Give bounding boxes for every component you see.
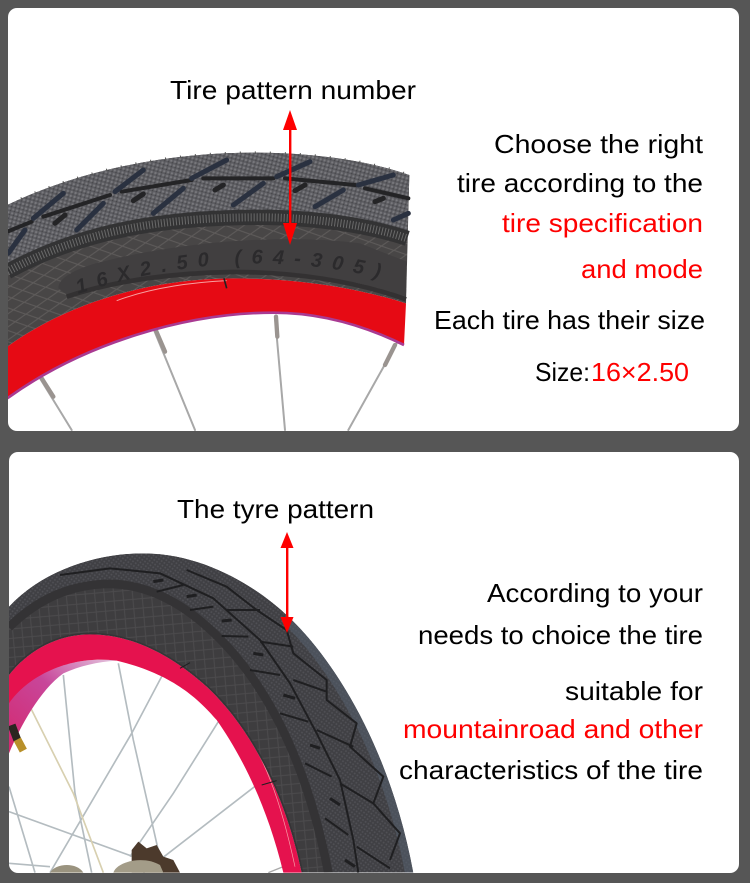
photo: wheel with pink rim <box>9 553 413 873</box>
text block: size: 16×2.50 <box>591 357 689 387</box>
text block: choose the right tire: tire specification <box>502 208 703 238</box>
rim <box>9 634 302 873</box>
rim <box>7 278 406 398</box>
label: tire pattern number: Tire pattern number <box>170 75 416 105</box>
text block: choose the right tire: and mode <box>581 254 703 284</box>
tire body <box>7 153 409 347</box>
text block: suitable terrain: mountainroad and other <box>403 714 703 744</box>
valve mark <box>224 278 227 288</box>
text block: choice the tire <box>420 583 703 644</box>
text block: suitable terrain <box>400 681 703 780</box>
sidewall marking: 16X2.50 (64-305) <box>77 250 381 293</box>
panel: tyre pattern <box>9 452 739 873</box>
text block: size: Size: <box>535 357 590 387</box>
text block: choose the right tire: Choose the right <box>494 129 704 159</box>
arrow: tyre pattern <box>280 532 294 633</box>
tread grooves <box>7 160 408 253</box>
text block: choice the tire: needs to choice the tire <box>418 620 703 650</box>
photo: tire close-up with red rim <box>7 153 409 430</box>
spokes and hub <box>9 663 283 873</box>
panel: tire size <box>8 8 739 431</box>
arrow: tire pattern number <box>283 110 297 245</box>
text block: size <box>436 310 704 382</box>
text block: choose the right tire <box>457 129 704 284</box>
text block: choose the right tire: tire according to the <box>457 168 703 198</box>
text block: choice the tire: According to your <box>487 578 703 608</box>
label: the tyre pattern: The tyre pattern <box>177 494 374 524</box>
tread grooves <box>60 568 400 873</box>
text block: suitable terrain: characteristics of the tire <box>399 755 703 785</box>
tire body <box>9 553 413 873</box>
text block: size: Each tire has their size <box>434 305 705 335</box>
spokes <box>40 317 397 430</box>
text block: suitable terrain: suitable for <box>565 676 703 706</box>
valve <box>12 725 23 751</box>
